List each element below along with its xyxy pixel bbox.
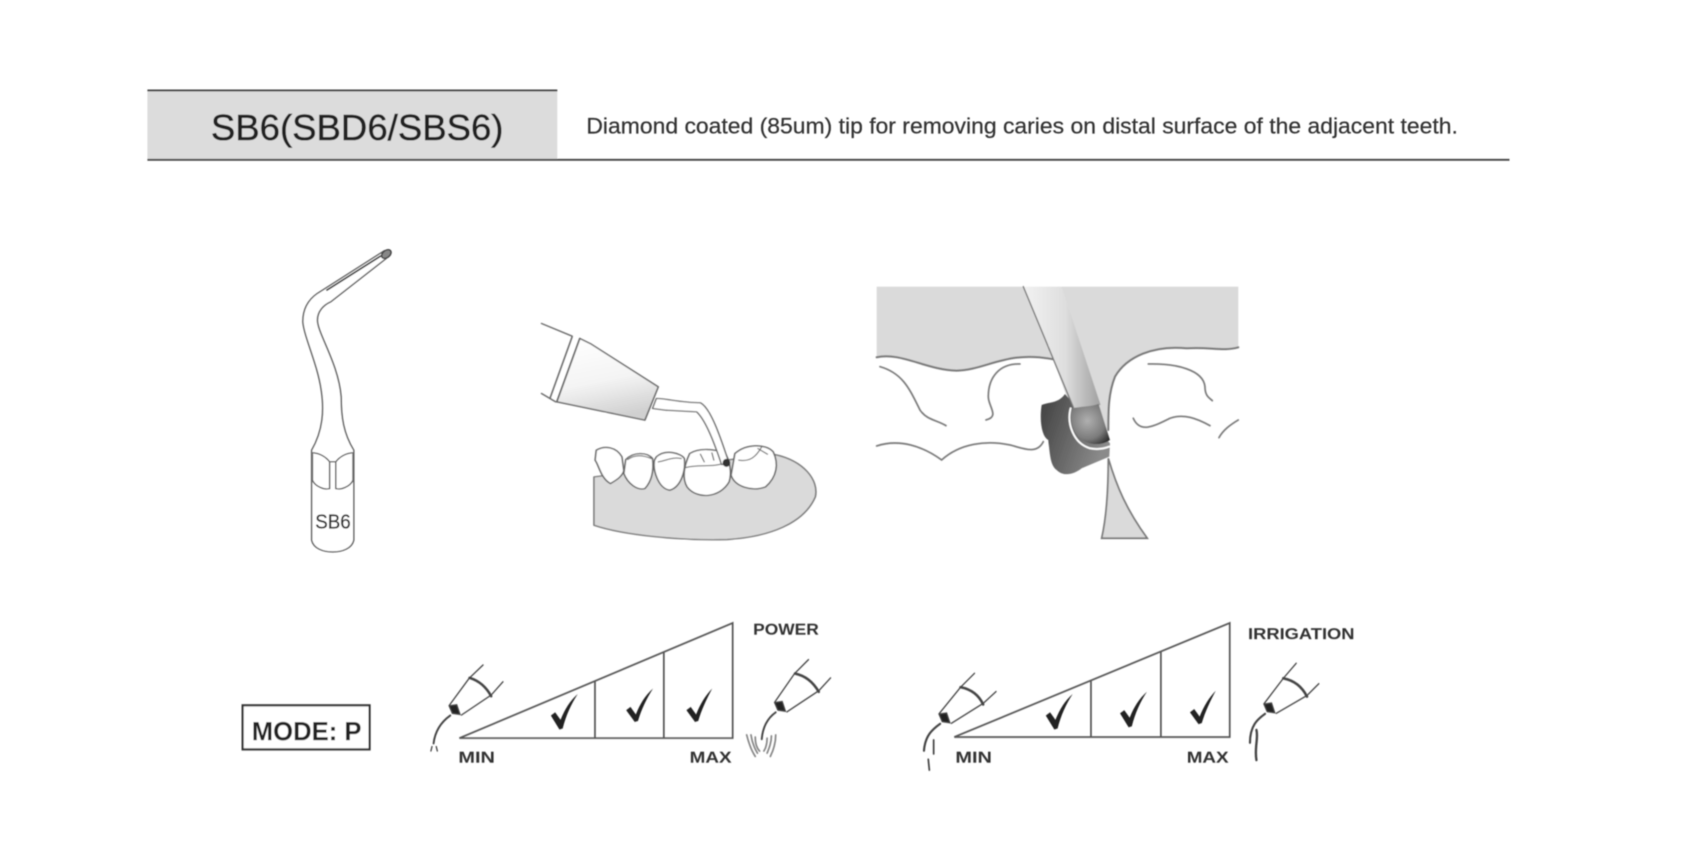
icon: handpiece high power with vibration <box>747 660 831 756</box>
check marks <box>551 689 712 729</box>
icon: handpiece low irrigation <box>924 673 996 770</box>
description: Diamond coated (85um) tip for removing caries on distal surface of the adjacent teeth. <box>586 113 1458 138</box>
caries site <box>723 459 730 467</box>
instrument shaft <box>1023 287 1101 408</box>
mode badge <box>243 705 370 749</box>
scale labels: MAX <box>1187 749 1229 767</box>
teeth <box>595 446 776 495</box>
illustration: handpiece on lower teeth <box>541 323 816 540</box>
illustration: SB6 scaler tip <box>303 248 393 552</box>
scale labels: POWER <box>753 621 819 639</box>
scale labels: MIN <box>458 749 495 767</box>
handpiece sleeve <box>541 323 572 402</box>
gum papilla <box>1102 458 1147 538</box>
tooth outlines <box>877 356 1053 371</box>
illustration: close-up of tip in cavity <box>877 287 1238 538</box>
check marks <box>1046 691 1216 729</box>
mode badge: MODE: P <box>252 718 361 746</box>
power scale chart <box>458 621 819 767</box>
scale labels: MAX <box>690 749 732 767</box>
scale labels <box>955 625 1355 767</box>
scale labels <box>458 621 819 767</box>
scale labels: IRRIGATION <box>1248 625 1355 643</box>
irrigation scale chart <box>954 623 1355 767</box>
scale labels: MIN <box>955 749 992 767</box>
white crescent <box>1069 408 1109 449</box>
title: SB6(SBD6/SBS6) <box>211 107 504 148</box>
instrument shaft <box>653 398 729 465</box>
tip model label: SB6 <box>315 510 351 533</box>
diamond ball <box>1071 404 1110 444</box>
gum <box>594 454 816 540</box>
icon: handpiece low power <box>431 665 503 751</box>
caries cavity <box>1041 394 1110 474</box>
upper gum background <box>877 287 1238 430</box>
icon: handpiece high irrigation <box>1250 663 1319 760</box>
header band <box>147 90 1509 160</box>
